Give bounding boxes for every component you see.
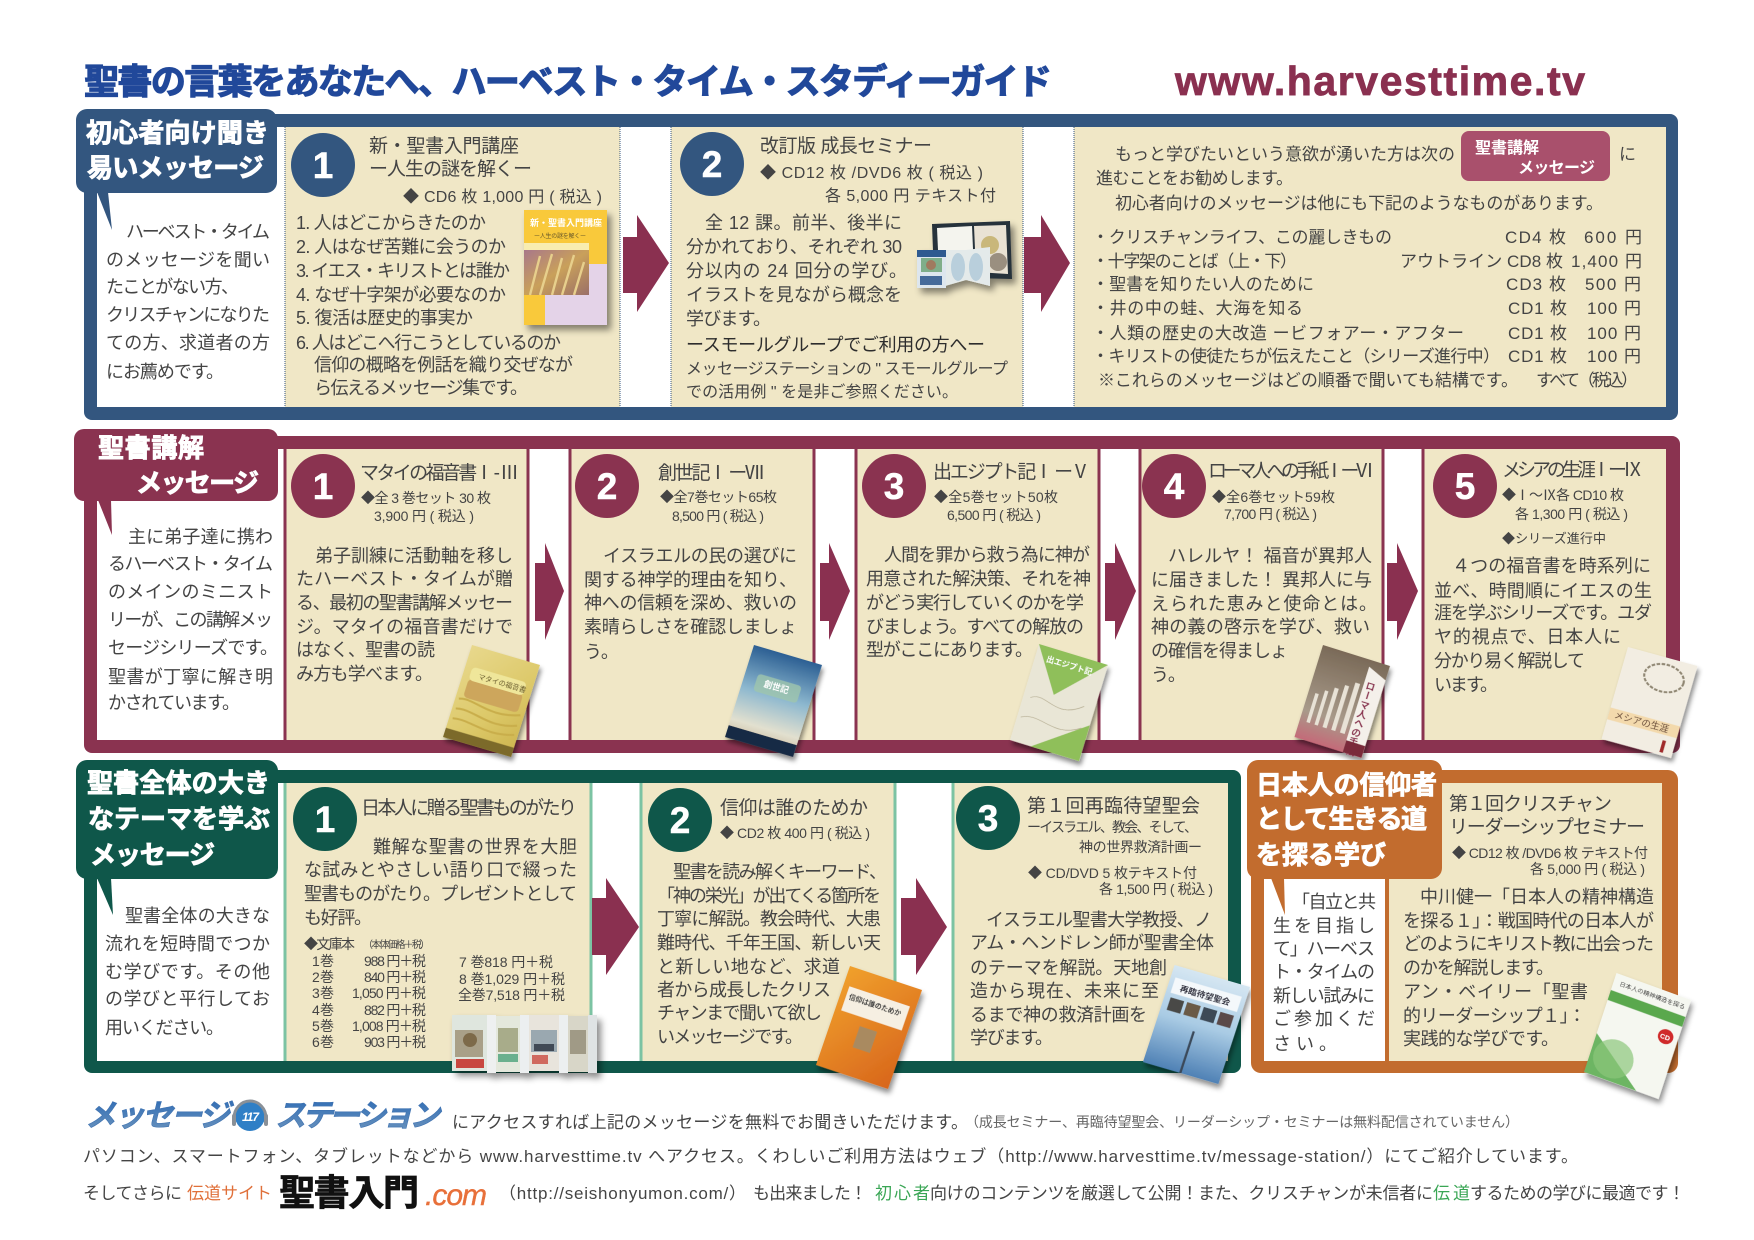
- icon: matthew book: [443, 645, 540, 757]
- card: bible story: も好評。: [304, 908, 372, 928]
- text: whole bible intro: の学びと平行してお: [105, 989, 270, 1009]
- card: new bible introduction: 信仰の概略を例話を織り交ぜなが: [314, 355, 573, 375]
- text: japanese believers intro: 新しい試みに: [1273, 986, 1375, 1006]
- card: leadership seminar: 実践的な学びです。: [1403, 1029, 1559, 1049]
- text: beginner intro: にお薦めです。: [106, 362, 224, 382]
- card: leadership seminar: 第１回クリスチャン: [1449, 793, 1612, 815]
- card: rapture conference: 造から現在、未来に至: [970, 981, 1159, 1001]
- card: matthew: る、最初の聖書講解メッセー: [296, 593, 513, 613]
- card: romans: に届きました！ 異邦人に与: [1151, 570, 1372, 590]
- card: rapture conference: イスラエル聖書大学教授、ノ: [986, 910, 1212, 930]
- arrow: [535, 543, 564, 640]
- text: japanese believers intro: ト・タイムの: [1273, 962, 1375, 982]
- card: genesis: う。: [584, 642, 619, 662]
- card: growth seminar: イラストを見ながら概念を: [686, 285, 902, 305]
- card: for whom is faith: 者から成長したクリス: [657, 980, 831, 1000]
- logo: message station: [85, 1098, 442, 1133]
- card: exodus: 3: [884, 466, 904, 507]
- card: romans: [1140, 449, 1383, 740]
- card: more messages: 100 円: [1587, 347, 1641, 366]
- text: expository intro: [108, 527, 278, 713]
- website url: www.harvesttime.tv: [1174, 58, 1585, 104]
- card: growth seminar: 分以内の 24 回分の学び。: [686, 261, 907, 281]
- card: for whom is faith: 信仰は誰のためか: [720, 797, 868, 819]
- card: leadership seminar: アン・ベイリー「聖書: [1403, 982, 1588, 1002]
- text: japanese believers intro: 「自立と共: [1292, 892, 1376, 912]
- card: life of messiah: ◆シリーズ進行中: [1502, 531, 1606, 546]
- card: romans: 7,700 円 ( 税込 ): [1224, 506, 1317, 522]
- card: growth seminar: 各 5,000 円 テキスト付: [825, 187, 996, 205]
- card: growth seminar: 学びます。: [686, 309, 771, 329]
- text: expository intro: のメインのミニスト: [108, 582, 273, 602]
- card: bible story: 聖書ものがたり。プレゼントとして: [304, 884, 577, 904]
- arrow: [623, 215, 669, 312]
- card: rapture conference: 第１回再臨待望聖会: [1027, 795, 1200, 817]
- card: life of messiah: 並べ、時間順にイエスの生: [1434, 581, 1652, 601]
- footer: message station: 初心者: [875, 1184, 930, 1203]
- label: expository: 聖書講解: [98, 433, 204, 463]
- card: life of messiah: [1423, 449, 1666, 740]
- card: matthew: [285, 449, 528, 740]
- card: life of messiah: ◆Ⅰ～Ⅸ各 CD10 枚: [1502, 487, 1624, 503]
- card: for whom is faith: と新しい地など、求道: [657, 957, 840, 977]
- text: beginner intro: [106, 222, 270, 382]
- card: genesis: 神への信頼を深め、救いの: [584, 593, 797, 613]
- price table: 5 巻: [312, 1018, 334, 1034]
- card: genesis: [570, 449, 814, 740]
- text: whole bible intro: 聖書全体の大きな: [125, 906, 270, 926]
- card: for whom is faith: 2: [670, 800, 690, 841]
- card: new bible introduction: ◆ CD6 枚 1,000 円 ( 税込 ): [403, 188, 602, 206]
- card: exodus: 用意された解決策、それを神: [866, 569, 1091, 589]
- icon: green book: CD: [1659, 1033, 1671, 1043]
- card: rapture conference: 神の世界救済計画ー: [1079, 839, 1202, 855]
- card: genesis: 8,500 円 ( 税込 ): [672, 508, 764, 524]
- label: beginner: 易いメッセージ: [87, 153, 264, 183]
- card: life of messiah: います。: [1434, 675, 1498, 695]
- icon: genesis book: 創世記: [763, 679, 791, 696]
- card: more messages: CD1 枚: [1508, 324, 1567, 343]
- card: rapture conference: ◆ CD/DVD 5 枚テキスト付: [1028, 865, 1197, 881]
- card: genesis: 2: [597, 466, 617, 507]
- price table: 1,008 円＋税: [352, 1018, 426, 1034]
- card: rapture conference: アム・ヘンドレン師が聖書全体: [970, 933, 1214, 953]
- card: for whom is faith: いメッセージです。: [657, 1027, 803, 1047]
- label: japanese believers: として生きる道: [1256, 804, 1427, 834]
- card: exodus: ◆全5巻セット50枚: [934, 489, 1058, 505]
- card: more messages: アウトライン CD8 枚: [1400, 252, 1563, 271]
- card: growth seminar: メッセージステーションの " スモールグループ: [686, 360, 1008, 378]
- card: more messages: 1,400 円: [1571, 252, 1642, 271]
- footer: message station: 伝道: [1433, 1184, 1470, 1203]
- card: for whom is faith: チャンまで聞いて欲し: [657, 1003, 822, 1023]
- text: japanese believers intro: さい。: [1273, 1034, 1337, 1054]
- card: more messages: ・井の中の蛙、大海を知る: [1092, 299, 1303, 318]
- icon: matthew book: マタイの福音書: [477, 672, 527, 694]
- card: bible story: な試みとやさしい語り口で綴った: [304, 860, 577, 880]
- logo: seisho nyumon: 聖書入門: [279, 1172, 419, 1213]
- card: exodus: [856, 449, 1099, 740]
- text: expository intro: リーが、この講解メッ: [108, 610, 273, 630]
- card: new bible introduction: 1: [313, 145, 333, 186]
- card: genesis: ◆全7巻セット65枚: [660, 489, 777, 505]
- card: bible story: ◆文庫本: [304, 936, 355, 952]
- footer: message station: パソコン、スマートフォン、タブレットなどから www.harvesttime.tv へアクセス。くわしいご利用方法はウェブ（http://www.harvesttime.tv/message-station/）にてご紹介しています。: [83, 1146, 1578, 1166]
- arrow: [592, 878, 639, 975]
- price table: 3 巻: [312, 985, 334, 1001]
- footer: message station: 向けのコンテンツを厳選して公開！また、クリスチャンが未信者に: [930, 1184, 1433, 1203]
- card: romans: えられた恵みと使命とは。: [1151, 594, 1377, 614]
- card: leadership seminar: を探る１」：戦国時代の日本人が: [1403, 911, 1654, 931]
- card: more messages: に: [1619, 145, 1636, 164]
- card: bible story: 日本人に贈る聖書ものがたり: [361, 797, 577, 819]
- card: leadership seminar: 中川健一「日本人の精神構造: [1420, 887, 1654, 907]
- price table: 903 円＋税: [364, 1034, 426, 1050]
- text: beginner intro: ての方、求道者の方: [106, 333, 270, 353]
- label: beginner: [76, 109, 277, 230]
- text: whole bible intro: [105, 906, 270, 1038]
- arrow: [1387, 543, 1418, 640]
- text: expository intro: かされています。: [108, 693, 240, 713]
- card: for whom is faith: 聖書を読み解くキーワード、: [673, 862, 887, 882]
- card: for whom is faith: 難時代、千年王国、新しい天: [657, 933, 881, 953]
- icon: book cover: ー人生の謎を解くー: [534, 232, 586, 240]
- card: leadership seminar: のかを解説します。: [1403, 958, 1554, 978]
- price table: 8 巻1,029 円＋税: [459, 971, 565, 987]
- card: growth seminar: での活用例 " を是非ご参照ください。: [686, 383, 958, 401]
- text: beginner intro: のメッセージを聞い: [106, 250, 270, 270]
- card: romans: 神の義の啓示を学び、救い: [1151, 617, 1370, 637]
- label: expository: [74, 429, 278, 535]
- icon: book cover: 新・聖書入門講座: [530, 217, 602, 228]
- card: new bible introduction: 新・聖書入門講座: [369, 135, 519, 157]
- footer: message station: も出来ました！: [753, 1184, 867, 1203]
- icon: green book: 日本人の精神構造を探る: [1618, 980, 1686, 1011]
- card: more messages: CD1 枚: [1508, 299, 1567, 318]
- price table: 2 巻: [312, 969, 334, 985]
- card: matthew: 1: [313, 466, 333, 507]
- text: japanese believers intro: ご参加くだ: [1273, 1009, 1375, 1029]
- label: whole bible: なテーマを学ぶ: [88, 804, 270, 834]
- card: leadership seminar: [1403, 793, 1654, 1049]
- card: matthew: マタイの福音書Ⅰ - Ⅲ: [360, 462, 519, 484]
- label: whole bible: メッセージ: [90, 840, 215, 870]
- text: expository intro: 聖書が丁寧に解き明: [108, 667, 273, 687]
- card: new bible introduction: 3. イエス・キリストとは誰か: [296, 261, 510, 281]
- icon: boxed books: [452, 1015, 597, 1073]
- badge: expository message: [1461, 131, 1610, 181]
- card: rapture conference: 学びます。: [970, 1028, 1053, 1048]
- label: whole bible: [76, 760, 278, 915]
- card: leadership seminar: 各 5,000 円 ( 税込 ): [1530, 861, 1645, 877]
- card: more messages: ・聖書を知りたい人のために: [1092, 275, 1314, 294]
- title: 聖書の言葉をあなたへ、ハーベスト・タイム・スタディーガイド: [84, 62, 1052, 102]
- price table: 4 巻: [312, 1002, 334, 1018]
- badge: expository message: 聖書講解: [1475, 138, 1539, 157]
- card: leadership seminar: ◆ CD12 枚 /DVD6 枚 テキスト付: [1452, 845, 1648, 861]
- logo: message station: メッセージ: [85, 1098, 234, 1133]
- card: romans: ◆全6巻セット59枚: [1212, 489, 1335, 505]
- card: life of messiah: 各 1,300 円 ( 税込 ): [1515, 506, 1628, 522]
- card: for whom is faith: 丁寧に解説。教会時代、大患: [657, 909, 881, 929]
- label: expository: メッセージ: [136, 468, 259, 498]
- card: matthew: ◆全 3 巻セット 30 枚: [361, 490, 491, 506]
- card: more messages: もっと学びたいという意欲が湧いた方は次の: [1115, 145, 1455, 164]
- arrow: [820, 543, 850, 640]
- card: more messages: 500 円: [1585, 275, 1641, 294]
- card: more messages: ・人類の歴史の大改造 ービフォアー・アフター: [1092, 324, 1464, 343]
- card: more messages: ・十字架のことば（上・下）: [1092, 252, 1297, 271]
- card: new bible introduction: ら伝えるメッセージ集です。: [314, 378, 528, 398]
- card: exodus: 型がここにあります。: [866, 640, 1033, 660]
- icon: blue conference book: [1143, 965, 1250, 1084]
- card: new bible introduction: 5. 復活は歴史的事実か: [296, 308, 473, 328]
- price table: 840 円＋税: [364, 969, 426, 985]
- card: new bible introduction: 6. 人はどこへ行こうとしているのか: [296, 333, 561, 353]
- card: romans: ローマ人への手紙Ⅰ ーⅥ: [1208, 460, 1374, 482]
- card: life of messiah: 分かり易く解説して: [1434, 651, 1585, 671]
- text: beginner intro: ハーベスト・タイム: [126, 222, 270, 242]
- label: japanese believers: を探る学び: [1256, 840, 1386, 870]
- label: whole bible: 聖書全体の大き: [87, 768, 270, 798]
- card: bible story: （本体価格＋税）: [363, 938, 430, 951]
- card: more messages: 100 円: [1587, 299, 1641, 318]
- card: rapture conference: のテーマを解説。天地創: [970, 958, 1167, 978]
- logo: seisho nyumon: [279, 1172, 487, 1213]
- text: whole bible intro: む学びです。その他: [105, 962, 270, 982]
- text: japanese believers intro: [1273, 892, 1376, 1054]
- text: whole bible intro: 流れを短時間でつか: [105, 934, 270, 954]
- card: exodus: 出エジプト記Ⅰ ーⅤ: [933, 461, 1090, 483]
- icon: exodus book: [1010, 644, 1108, 761]
- card: genesis: 関する神学的理由を知り、: [584, 570, 797, 590]
- card: leadership seminar: どのようにキリスト教に出会った: [1403, 934, 1654, 954]
- card: more messages: CD1 枚: [1508, 347, 1567, 366]
- footer: message station: するための学びに最適です！: [1470, 1184, 1685, 1203]
- text: beginner intro: たことがない方、: [106, 277, 239, 297]
- card: new bible introduction: [285, 127, 620, 407]
- card: more messages: ※これらのメッセージはどの順番で聞いても結構です。: [1098, 371, 1518, 390]
- card: romans: の確信を得ましょ: [1151, 641, 1288, 661]
- card: more messages: ・クリスチャンライフ、この麗しきもの: [1092, 228, 1392, 247]
- icon: genesis book: [725, 645, 822, 757]
- card: more messages: すべて（税込）: [1536, 371, 1638, 390]
- label: beginner: 初心者向け聞き: [86, 118, 269, 148]
- card: new bible introduction: ー人生の謎を解くー: [369, 158, 532, 180]
- card: growth seminar: 改訂版 成長セミナー: [760, 135, 932, 157]
- card: matthew: ジ。マタイの福音書だけで: [296, 617, 513, 637]
- card: exodus: びましょう。すべての解放の: [866, 617, 1084, 637]
- panel: expository messages: [74, 429, 1698, 761]
- card: growth seminar: ースモールグループでご利用の方へー: [686, 335, 985, 355]
- card: exodus: 6,500 円 ( 税込 ): [947, 507, 1041, 523]
- card: bible story: 1: [315, 799, 335, 840]
- card: rapture conference: ーイスラエル、教会、そして、: [1027, 819, 1198, 835]
- icon: blue conference book: 再臨待望聖会: [1179, 983, 1232, 1007]
- card: leadership seminar: リーダーシップセミナー: [1449, 816, 1645, 838]
- icon: green book: [1584, 973, 1691, 1099]
- card: rapture conference: 各 1,500 円 ( 税込 ): [1099, 881, 1213, 897]
- price table: 全巻7,518 円＋税: [458, 987, 565, 1003]
- text: beginner intro: クリスチャンになりた: [106, 305, 270, 325]
- price table: 1,050 円＋税: [352, 985, 426, 1001]
- price table: 7 巻818 円＋税: [459, 954, 553, 970]
- icon: romans book: [1294, 645, 1390, 760]
- card: more messages: 100 円: [1587, 324, 1641, 343]
- card: life of messiah: ヤ的視点で、日本人に: [1434, 627, 1621, 647]
- icon: orange book: [816, 966, 922, 1089]
- text: expository intro: るハーベスト・タイム: [108, 554, 273, 574]
- footer: message station: 伝道サイト: [187, 1184, 272, 1203]
- footer: message station: そしてさらに: [83, 1184, 182, 1203]
- icon: messiah book: メシアの生涯: [1613, 709, 1670, 734]
- card: exodus: 人間を罪から救う為に神が: [884, 545, 1090, 565]
- card: matthew: 弟子訓練に活動軸を移し: [315, 546, 513, 566]
- card: more messages: CD4 枚: [1505, 228, 1566, 247]
- icon: exodus book: 出エジプト記: [1045, 653, 1094, 677]
- card: more messages: 進むことをお勧めします。: [1096, 169, 1293, 188]
- panel: beginner messages: [76, 109, 1678, 420]
- card: for whom is faith: [641, 783, 895, 1061]
- card: romans: 4: [1164, 466, 1185, 507]
- card: more messages: ・キリストの使徒たちが伝えたこと（シリーズ進行中）: [1092, 346, 1500, 366]
- text: japanese believers intro: 生を目指し: [1273, 916, 1375, 936]
- card: growth seminar: [671, 127, 1023, 407]
- card: new bible introduction: 2. 人はなぜ苦難に会うのか: [296, 237, 506, 257]
- footer: message station: （成長セミナー、再臨待望聖会、リーダーシップ・セミナーは無料配信されていません）: [965, 1114, 1519, 1130]
- card: for whom is faith: 「神の栄光」が出てくる箇所を: [657, 886, 881, 906]
- card: genesis: 創世記Ⅰ ーⅦ: [658, 462, 764, 484]
- card: for whom is faith: ◆ CD2 枚 400 円 ( 税込 ): [720, 825, 870, 841]
- card: matthew: たハーベスト・タイムが贈: [296, 569, 513, 589]
- footer: message station: にアクセスすれば上記のメッセージを無料でお聞きいただけます。: [452, 1113, 968, 1132]
- text: expository intro: 主に弟子達に携わ: [128, 527, 273, 547]
- price table: 1 巻: [312, 953, 334, 969]
- logo: message station: ステーション: [275, 1098, 442, 1133]
- card: romans: ハレルヤ！ 福音が異邦人: [1168, 546, 1372, 566]
- arrow: [1105, 543, 1136, 640]
- card: romans: う。: [1151, 665, 1186, 685]
- logo: message station: 117: [242, 1110, 260, 1124]
- text: japanese believers intro: て」ハーベス: [1273, 939, 1375, 959]
- card: rapture conference: [953, 783, 1228, 1061]
- card: rapture conference: るまで神の救済計画を: [970, 1005, 1147, 1025]
- footer: message station: （http://seishonyumon.com/）: [499, 1184, 746, 1203]
- card: growth seminar: 2: [702, 144, 722, 185]
- card: more messages: 初心者向けのメッセージは他にも下記のようなものがあります。: [1115, 194, 1603, 213]
- card: bible story: [285, 783, 591, 1061]
- card: life of messiah: 涯を学ぶシリーズです。ユダ: [1434, 603, 1652, 623]
- card: more messages: 600 円: [1584, 228, 1642, 247]
- price table: 988 円＋税: [364, 953, 426, 969]
- card: more messages: [1074, 127, 1666, 407]
- panel: whole bible themes: [76, 760, 1250, 1089]
- arrow: [1024, 215, 1070, 312]
- card: life of messiah: ４つの福音書を時系列に: [1452, 556, 1651, 576]
- badge: expository message: メッセージ: [1518, 160, 1595, 177]
- card: growth seminar: 全 12 課。前半、後半に: [705, 213, 902, 233]
- card: bible story: 難解な聖書の世界を大胆: [373, 837, 577, 857]
- text: whole bible intro: 用いください。: [105, 1018, 224, 1038]
- logo: seisho nyumon: .com: [425, 1179, 487, 1212]
- card: genesis: 素晴らしさを確認しましょ: [584, 617, 797, 637]
- card: leadership seminar: 的リーダーシップ１」：: [1403, 1006, 1586, 1026]
- icon: messiah book: [1602, 647, 1698, 758]
- card: more messages: CD3 枚: [1506, 275, 1566, 294]
- icon: book cover: [524, 210, 607, 325]
- panel: japanese believers: [1247, 760, 1691, 1099]
- card: rapture conference: 3: [978, 798, 998, 839]
- text: expository intro: セージシリーズです。: [108, 638, 278, 658]
- card: genesis: イスラエルの民の選びに: [603, 546, 797, 566]
- card: new bible introduction: 1. 人はどこからきたのか: [296, 213, 486, 233]
- card: matthew: 3,900 円 ( 税込 ): [374, 508, 474, 524]
- price table: [312, 953, 565, 1050]
- footer: message station: [83, 1098, 1685, 1213]
- card: growth seminar: 分かれており、それぞれ 30: [686, 237, 902, 257]
- label: japanese believers: [1247, 760, 1442, 915]
- icon: romans book: ローマ人への手紙: [1342, 680, 1377, 758]
- card: new bible introduction: 4. なぜ十字架が必要なのか: [296, 285, 506, 305]
- label: japanese believers: 日本人の信仰者: [1256, 770, 1437, 800]
- card: matthew: み方も学べます。: [296, 664, 433, 684]
- card: life of messiah: メシアの生涯Ⅰ ーⅨ: [1502, 459, 1642, 481]
- price table: 882 円＋税: [364, 1002, 426, 1018]
- card: life of messiah: 5: [1455, 466, 1475, 507]
- card: growth seminar: ◆ CD12 枚 /DVD6 枚 ( 税込 ): [760, 164, 983, 182]
- card: exodus: がどう実行していくのかを学: [866, 593, 1084, 613]
- icon: orange book: 信仰は誰のためか: [848, 992, 903, 1018]
- icon: dvd set: [917, 221, 1012, 288]
- arrow: [901, 878, 947, 975]
- price table: 6 巻: [312, 1034, 334, 1050]
- card: matthew: はなく、聖書の読: [296, 640, 435, 660]
